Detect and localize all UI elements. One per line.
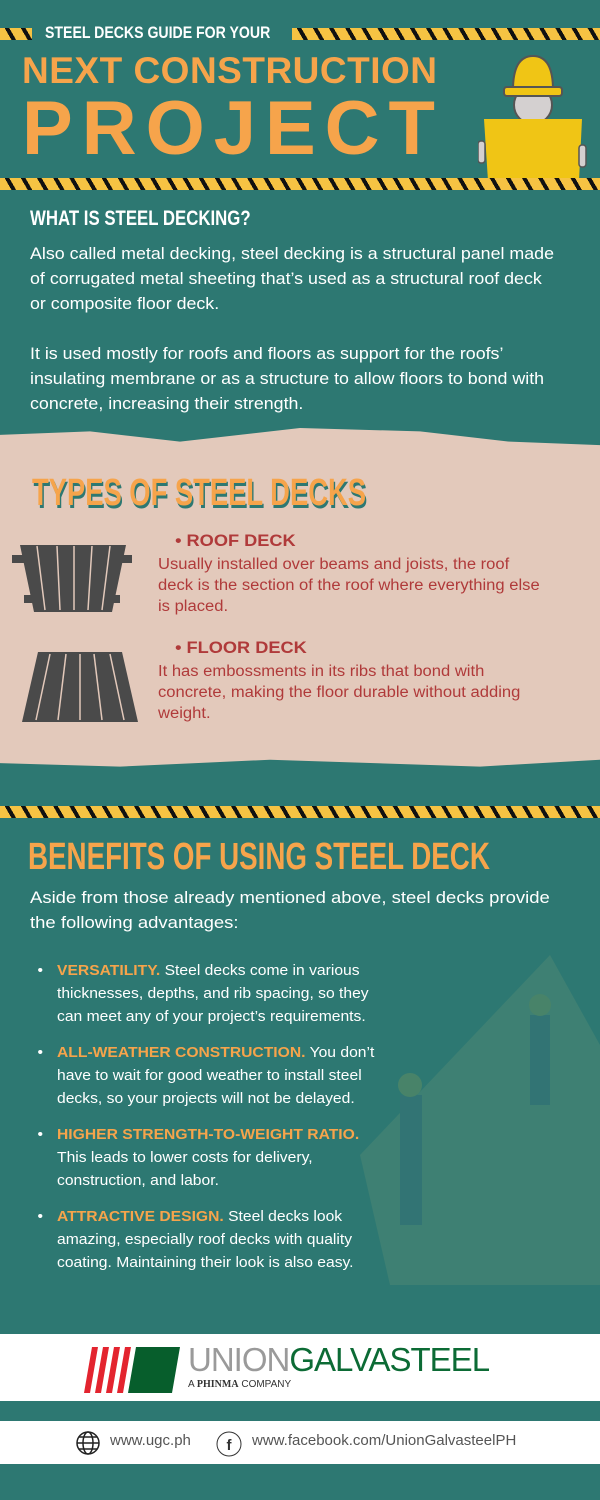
- text: roof deck: deck is the section of the roof where everything else: [158, 577, 540, 594]
- benefit: versatility: VERSATILITY. Steel decks come in various: [57, 963, 360, 979]
- icon: floor deck: [22, 652, 138, 722]
- icon: roof deck: [12, 545, 132, 612]
- text: definition: of corrugated metal sheeting that’s used as a structural roof deck: [30, 270, 542, 288]
- heading: types of steel decks: TYPES OF STEEL DECKS: [32, 472, 366, 514]
- benefit: attractive design: amazing, especially roof decks with quality: [57, 1232, 352, 1248]
- text: definition: Also called metal decking, steel decking is a structural panel made: [30, 245, 554, 263]
- main title: NEXT CONSTRUCTION: [22, 50, 438, 91]
- text: definition: concrete, increasing their strength.: [30, 395, 303, 413]
- benefit: strength ratio: This leads to lower costs for delivery,: [57, 1150, 313, 1166]
- text: floor deck: It has embossments in its ribs that bond with: [158, 663, 484, 680]
- text: roof deck: • ROOF DECK: [175, 531, 296, 550]
- text: floor deck: • FLOOR DECK: [175, 638, 307, 657]
- text: roof deck: Usually installed over beams and joists, the roof: [158, 556, 509, 573]
- icon: facebook: [216, 1432, 242, 1456]
- benefit: versatility: thicknesses, depths, and rib spacing, so they: [57, 986, 369, 1002]
- benefit: all-weather: have to wait for good weather to install steel: [57, 1068, 362, 1084]
- benefit: attractive design: ATTRACTIVE DESIGN. Steel decks look: [57, 1209, 342, 1225]
- text: benefits intro: the following advantages:: [30, 914, 239, 932]
- text: benefits intro: [30, 889, 550, 932]
- benefit: all-weather: decks, so your projects will not be delayed.: [57, 1091, 355, 1107]
- logo band: [0, 1334, 600, 1401]
- top hazard stripe left: [0, 28, 32, 40]
- text: website: www.ugc.ph: [110, 1432, 191, 1449]
- text: facebook: www.facebook.com/UnionGalvasteelPH: [252, 1432, 516, 1449]
- text: definition: or composite floor deck.: [30, 295, 219, 313]
- text: benefits intro: Aside from those already mentioned above, steel decks provide: [30, 889, 550, 907]
- logo text: UNIONGALVASTEEL: [188, 1341, 489, 1378]
- benefit: strength ratio: HIGHER STRENGTH-TO-WEIGHT RATIO.: [57, 1127, 359, 1143]
- benefit: strength ratio: [30, 1124, 374, 1193]
- list: benefits: [38, 963, 374, 1271]
- icon: globe: [76, 1431, 100, 1455]
- benefit: versatility: [30, 960, 374, 1029]
- text: definition: insulating membrane or as a structure to allow floors to bond with: [30, 370, 544, 388]
- panel: types of steel decks: [0, 428, 600, 770]
- top hazard stripe right: [292, 28, 600, 40]
- logo mark: [84, 1347, 180, 1393]
- contact band: [0, 1421, 600, 1464]
- text: roof deck: is placed.: [158, 598, 228, 615]
- heading: what is steel decking: WHAT IS STEEL DECKING?: [30, 207, 251, 230]
- heading: benefits: BENEFITS OF USING STEEL DECK: [28, 836, 490, 878]
- benefit: all-weather: [30, 1042, 374, 1111]
- benefit: attractive design: coating. Maintaining their look is also easy.: [57, 1255, 354, 1271]
- text: definition: It is used mostly for roofs and floors as support for the roofs’: [30, 345, 503, 363]
- logo band: A PHINMA COMPANY: [188, 1379, 291, 1390]
- benefit: all-weather: ALL-WEATHER CONSTRUCTION. You don’t: [57, 1045, 374, 1061]
- icon: facebook: f: [226, 1437, 232, 1454]
- main title: PROJECT: [22, 86, 444, 171]
- illustration: faded workers and deck: [360, 956, 600, 1285]
- text: roof deck: [158, 534, 539, 614]
- header bottom hazard stripe: [0, 178, 600, 190]
- benefit: strength ratio: construction, and labor.: [57, 1173, 219, 1189]
- text: definition: [30, 245, 554, 413]
- hazard stripe middle: [0, 806, 600, 818]
- benefit: attractive design: [30, 1206, 374, 1275]
- text: floor deck: weight.: [158, 705, 211, 722]
- benefit: versatility: can meet any of your project’s requirements.: [57, 1009, 366, 1025]
- text: floor deck: [158, 642, 520, 722]
- icon: worker with helmet: [478, 55, 587, 178]
- subtitle: STEEL DECKS GUIDE FOR YOUR: [45, 23, 270, 42]
- text: floor deck: concrete, making the floor durable without adding: [158, 684, 520, 701]
